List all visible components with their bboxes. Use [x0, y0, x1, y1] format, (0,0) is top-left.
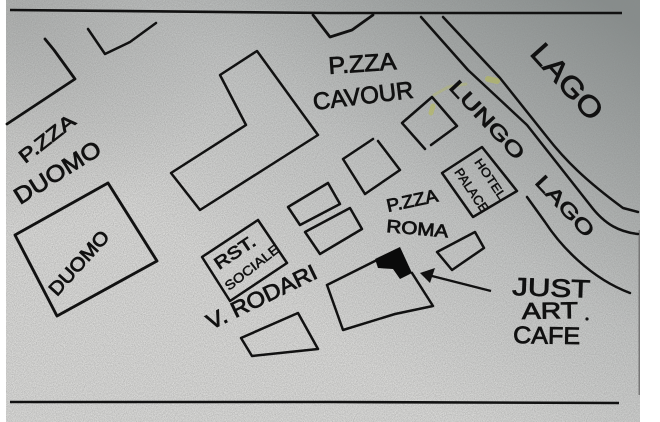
label: P.ZZA ROMA: P.ZZA [385, 186, 440, 216]
label: P.ZZA CAVOUR: P.ZZA [328, 48, 397, 80]
label: JUST ART CAFE: JUST [512, 273, 591, 304]
label: HOTEL PALACE: PALACE [452, 165, 492, 215]
streets and buildings [7, 15, 638, 356]
building: trapezoid block [241, 313, 318, 356]
label: LUNGO: LUNGO [444, 76, 529, 165]
label: LAGO on the road: LAGO [530, 171, 598, 242]
building: square block by Lungo Lago [402, 97, 457, 149]
building: square block [343, 139, 400, 194]
road: upper lakeside line [443, 17, 638, 212]
arrow to Just Art Cafe [420, 268, 491, 291]
block: L-shaped building [171, 51, 318, 210]
label: P.ZZA CAVOUR [311, 48, 415, 116]
label: P.ZZA DUOMO [9, 111, 106, 209]
building: Just Art Cafe block [327, 261, 433, 330]
block: top V shape [88, 23, 156, 54]
label: P.ZZA ROMA: ROMA [386, 216, 449, 241]
bottom border line [10, 402, 619, 403]
label: V. RODARI: V. RODARI [202, 259, 321, 334]
top border line [10, 10, 622, 13]
label: RST. SOCIALE: RST. [211, 232, 259, 273]
label: HOTEL PALACE [452, 156, 509, 215]
building: Duomo [15, 183, 157, 316]
block: top centre [313, 15, 373, 37]
label: LAGO: LAGO [524, 37, 609, 127]
label: P.ZZA DUOMO: P.ZZA [15, 111, 80, 168]
label: JUST ART CAFE: ART [522, 297, 578, 324]
label: JUST ART CAFE: CAFE [513, 322, 580, 350]
road: lower lakeside line [527, 197, 630, 293]
label: P.ZZA DUOMO: DUOMO [9, 135, 106, 209]
block: top left corner [7, 39, 75, 124]
building: small block 1 [288, 183, 340, 225]
label: RST. SOCIALE [211, 232, 282, 293]
label: JUST ART CAFE [512, 273, 591, 350]
building: small block 2 [305, 208, 362, 254]
label: P.ZZA ROMA [385, 186, 449, 241]
highlighter marks [431, 79, 497, 113]
label: RST. SOCIALE: SOCIALE [222, 241, 282, 293]
label: DUOMO building: DUOMO [45, 227, 114, 300]
building: Rst. Sociale [202, 220, 287, 301]
building: Hotel Palace [442, 147, 517, 217]
label: P.ZZA CAVOUR: CAVOUR [311, 77, 415, 116]
label: HOTEL PALACE: HOTEL [472, 156, 509, 202]
building: small rectangle [437, 232, 484, 270]
marker: Just Art Cafe location [375, 247, 412, 279]
road: middle lakeside line [421, 17, 638, 234]
